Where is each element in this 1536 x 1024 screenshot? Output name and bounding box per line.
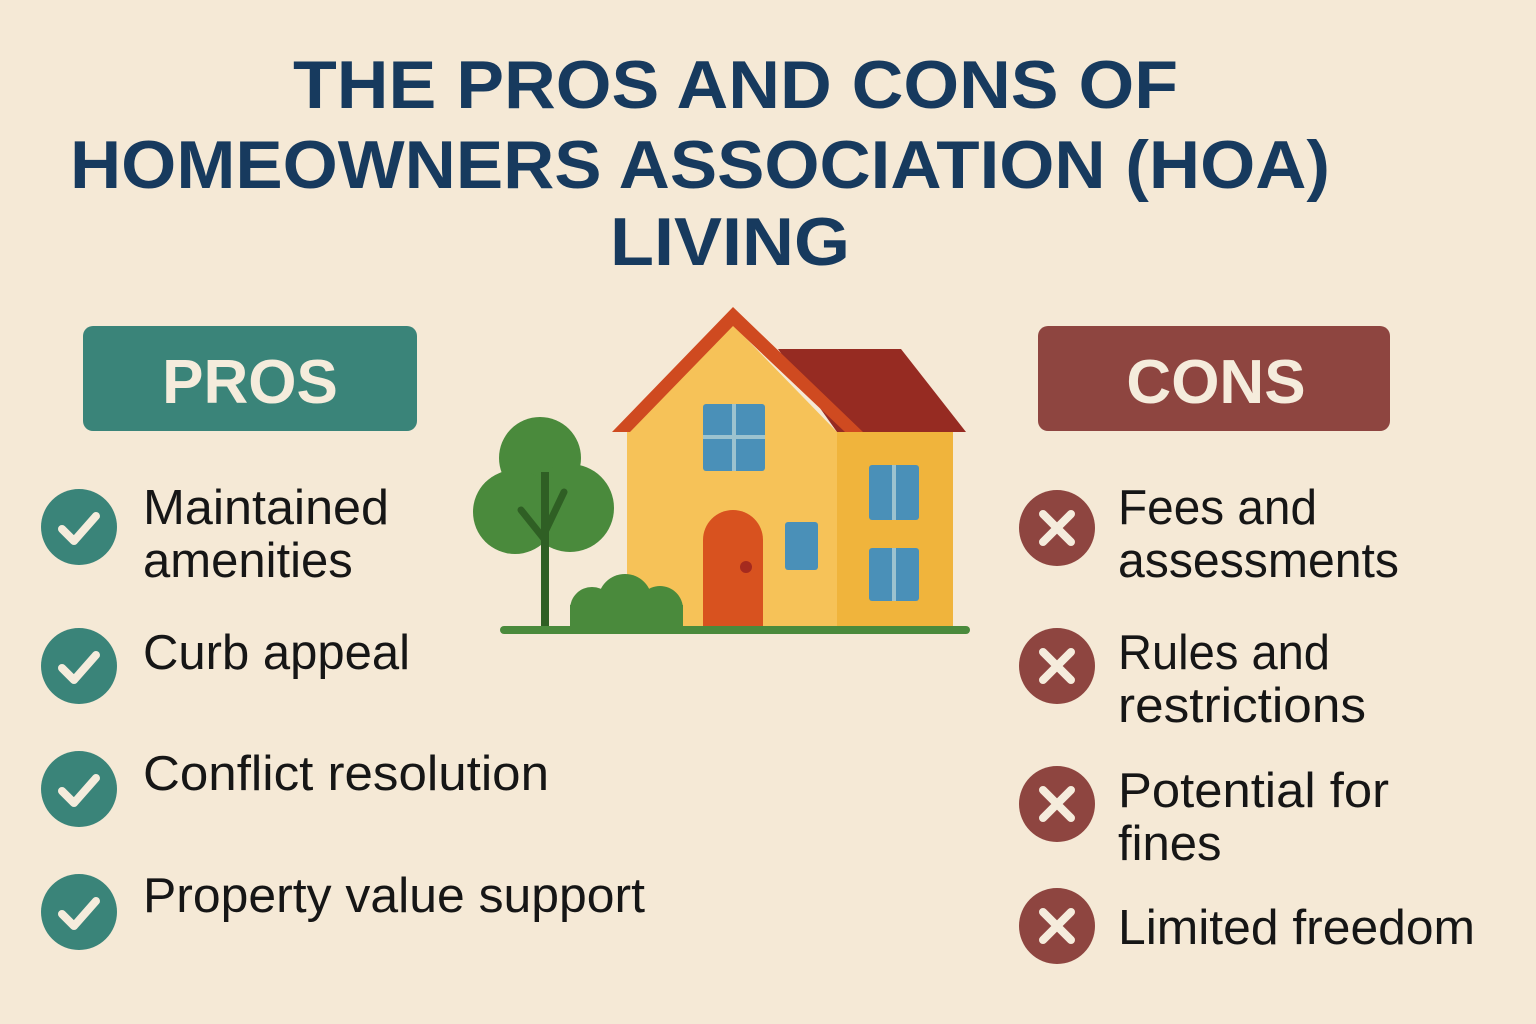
pro item 1: Maintained [143,481,389,535]
con item 3: Potential for [1118,764,1389,818]
con item 4: Limited freedom [1118,901,1475,955]
pro item 2: Curb appeal [143,626,410,680]
con item 1 [1019,481,1399,588]
con item 1: Fees and [1118,481,1317,535]
con item 1: assessments [1118,534,1399,588]
title: LIVING [610,204,850,280]
con item 3 [1019,764,1389,871]
bush [570,574,683,632]
title: HOMEOWNERS ASSOCIATION (HOA) [70,127,1330,203]
pro item 3 [41,747,549,827]
con item 3: fines [1118,817,1222,871]
house [612,307,966,628]
pro item 1 [41,481,389,588]
pros header [83,326,417,431]
pros header: PROS [162,348,338,417]
pros list [41,481,645,950]
pro item 2 [41,626,410,704]
pro item 1: amenities [143,534,353,588]
tree [473,417,614,628]
con item 2 [1019,626,1366,733]
con item 2: Rules and [1118,626,1330,680]
con item 4 [1019,888,1475,964]
title: THE PROS AND CONS OF [293,47,1178,123]
title [70,47,1330,280]
cons header: CONS [1126,348,1306,417]
pro item 3: Conflict resolution [143,747,549,801]
pro item 4: Property value support [143,869,645,923]
house illustration [473,307,970,634]
cons header [1038,326,1390,431]
cons list [1019,481,1475,964]
pro item 4 [41,869,645,950]
con item 2: restrictions [1118,679,1366,733]
